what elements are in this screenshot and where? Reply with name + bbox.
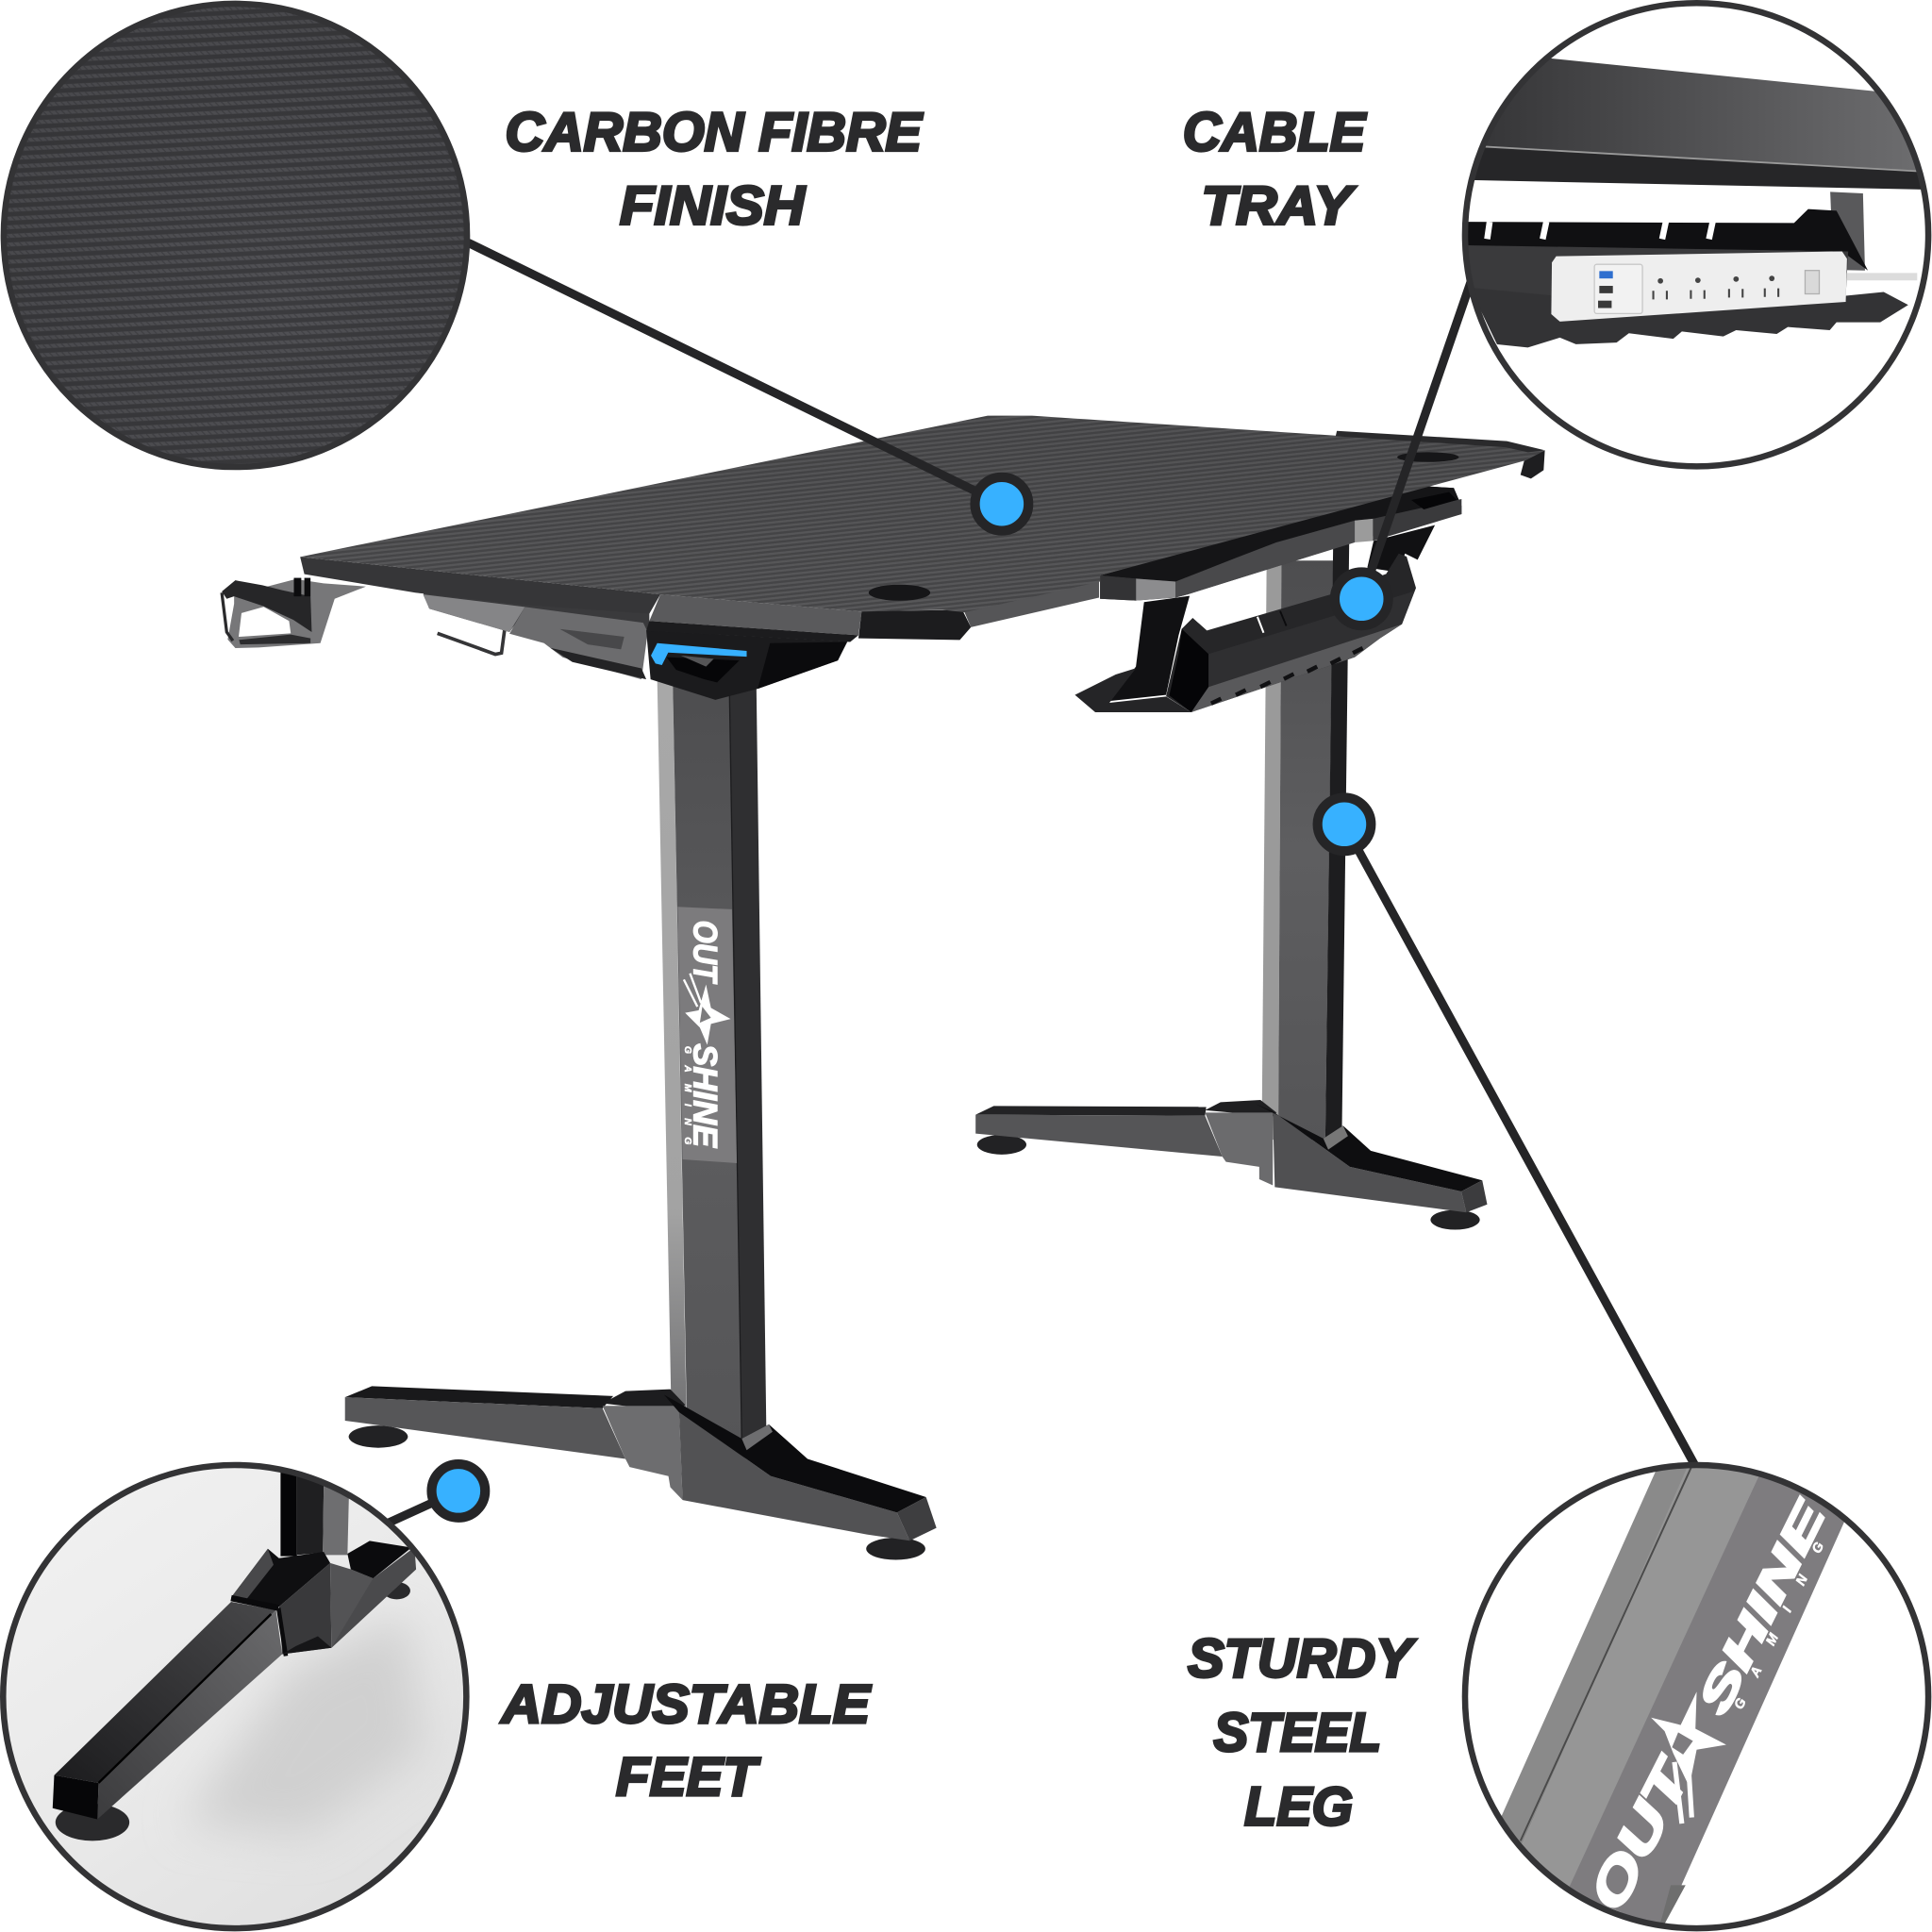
back foot hub	[1205, 1100, 1276, 1185]
panel: steel leg detail circle	[1465, 1454, 1928, 1932]
slots	[294, 578, 301, 596]
desk illustration	[222, 416, 1545, 1560]
beam faces	[54, 1602, 276, 1783]
logo panel on leg	[677, 907, 737, 1163]
foot pads	[387, 1583, 410, 1600]
logo panel on leg: OUT	[686, 921, 723, 985]
desk surface	[300, 416, 1544, 612]
dark strap	[222, 580, 311, 632]
back foot left arm	[975, 1106, 1223, 1157]
logo panel on leg: G A M I N G	[682, 1046, 692, 1144]
connector lines	[388, 242, 1695, 1523]
grey frame	[227, 579, 366, 648]
base foot	[1074, 668, 1191, 712]
tray body	[1166, 554, 1416, 712]
front foot pads	[349, 1425, 925, 1560]
base plate	[239, 635, 310, 644]
front corner	[858, 610, 971, 640]
tray back wall	[1460, 209, 1868, 271]
tray end	[1170, 629, 1208, 712]
heading: adjustable feet	[500, 1674, 872, 1807]
heading: carbon fibre finish	[506, 102, 924, 237]
grey chamfer	[649, 594, 861, 635]
logo text: SHINE: SHINE	[1688, 1492, 1836, 1722]
rear edge strip	[1336, 431, 1545, 452]
tray front face	[1208, 591, 1414, 687]
grommets	[869, 452, 1458, 601]
heading: carbon fibre finish: CARBON FIBRE	[506, 102, 924, 162]
back foot right arm	[1256, 1104, 1487, 1212]
leg stub	[1830, 192, 1865, 271]
heading: sturdy steel leg: STEEL	[1214, 1703, 1381, 1763]
logo panel on leg: SHINE	[686, 1043, 723, 1149]
logo text: OUT: OUT	[1577, 1747, 1704, 1920]
left wire	[222, 592, 233, 641]
back leg upright	[1261, 542, 1349, 1140]
marker: cable tray	[1335, 572, 1389, 625]
rocker switch	[1805, 271, 1819, 294]
hub faces	[231, 1549, 330, 1607]
marker: adjustable feet	[432, 1464, 485, 1518]
cable tray bracket and tray	[1074, 525, 1435, 712]
outlets	[1653, 275, 1779, 299]
cable slots	[1487, 222, 1713, 239]
underside panels	[415, 592, 649, 679]
logo small text: G A M I N G	[1732, 1540, 1827, 1712]
right end clamp	[1521, 450, 1545, 478]
desk slab	[1486, 58, 1916, 170]
marker: carbon fibre finish	[975, 477, 1028, 531]
heading: cable tray: TRAY	[1201, 176, 1357, 237]
front foot left arm	[345, 1386, 625, 1458]
heading: sturdy steel leg	[1188, 1629, 1417, 1837]
heading: cable tray: CABLE	[1183, 102, 1367, 162]
marker: steel leg	[1318, 797, 1371, 851]
floor shadow	[185, 1614, 425, 1836]
heading: cable tray	[1183, 102, 1367, 237]
heading: adjustable feet: ADJUSTABLE	[500, 1674, 872, 1735]
heading: adjustable feet: FEET	[616, 1747, 761, 1807]
wire hook	[438, 629, 505, 655]
tray lower band	[1191, 625, 1402, 712]
front leg upright	[658, 680, 766, 1448]
back leg assembly	[975, 542, 1487, 1230]
tray inner wall	[1468, 245, 1849, 296]
heading: sturdy steel leg: STURDY	[1188, 1629, 1417, 1690]
power strip	[1551, 251, 1847, 322]
heading: sturdy steel leg: LEG	[1244, 1776, 1353, 1837]
panel: carbon fibre detail circle	[4, 4, 467, 467]
leg faces	[280, 1460, 297, 1557]
usb panel	[1594, 264, 1642, 313]
front leg assembly	[345, 680, 937, 1560]
logo star	[1651, 1691, 1726, 1824]
left bracket	[1109, 596, 1190, 701]
panel: adjustable feet detail circle	[3, 1460, 466, 1928]
front foot hub	[603, 1390, 685, 1500]
right rail	[1100, 486, 1461, 601]
power cable	[1847, 274, 1917, 279]
panel: cable tray detail circle	[1460, 3, 1932, 466]
right underside edge	[963, 575, 1099, 627]
control box bracket	[646, 630, 847, 700]
heading: carbon fibre finish: FINISH	[620, 176, 806, 237]
front foot right arm	[664, 1395, 937, 1541]
table top	[300, 416, 1545, 712]
headset hook	[222, 578, 366, 648]
right bracket	[1367, 525, 1435, 573]
blue LED light	[651, 643, 747, 665]
back foot pads	[977, 1135, 1480, 1230]
front left edge	[300, 557, 660, 613]
tray bottom lip	[1472, 288, 1908, 347]
